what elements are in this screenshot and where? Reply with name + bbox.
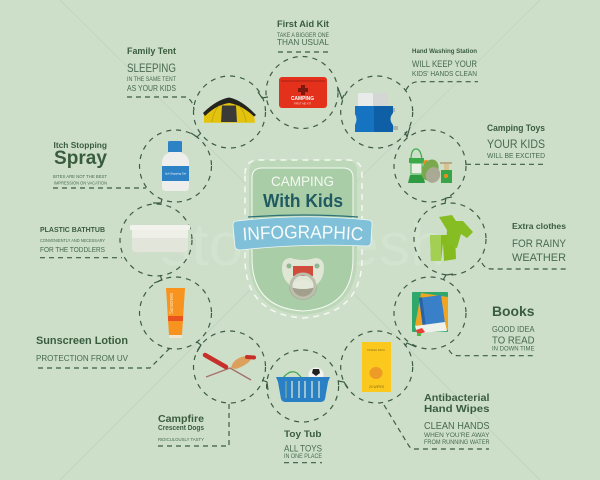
text: camping toys [487, 123, 545, 160]
panel: hand washing station [341, 48, 478, 148]
text: plastic bathtub: CONVENIENTLY AND NECESSARY [40, 238, 105, 243]
text: books: TO READ [492, 334, 535, 346]
ribbon banner [232, 216, 372, 250]
text: itch stopping spray: IMPRESSION ON VACATION [54, 180, 107, 186]
text: extra clothes [512, 221, 567, 264]
ribbon banner: INFOGRAPHIC [244, 225, 363, 240]
icon: wipes pack: TRAVEL PACK [367, 348, 385, 352]
text: hand washing station: Hand Washing Station [412, 48, 477, 55]
text: books: Books [492, 303, 535, 319]
icon: stack of books [412, 292, 448, 336]
text: hand washing station: KIDS' HANDS CLEAN [412, 71, 477, 78]
text: camping toys: WILL BE EXCITED [487, 153, 545, 160]
panel: antibacterial hand wipes [341, 331, 490, 449]
text: family tent: Family Tent [127, 46, 177, 57]
text: family tent [127, 46, 177, 93]
text: plastic bathtub: PLASTIC BATHTUB [40, 227, 105, 234]
text: itch stopping spray: Itch Stopping [54, 140, 107, 150]
icon: sunscreen tube: Sunscreen [169, 293, 175, 314]
text: itch stopping spray: BITES ARE NOT THE BEST [53, 174, 107, 179]
text: books: GOOD IDEA [492, 325, 535, 334]
text: campfire: Campfire [158, 414, 204, 425]
text: hand wipes: WHEN YOU'RE AWAY [424, 432, 490, 439]
icon: pacifier [282, 258, 324, 300]
panel: books [394, 277, 535, 356]
text: hand wipes [424, 392, 490, 446]
text: hand washing station: WILL KEEP YOUR [412, 59, 477, 69]
icon: hot dogs on sticks [205, 355, 254, 380]
text: itch stopping spray: Spray [54, 148, 107, 169]
text: toy tub: Toy Tub [284, 429, 322, 440]
panel: family tent [127, 46, 266, 148]
panel: toy tub [267, 350, 339, 463]
icon: first aid kit [279, 77, 327, 108]
text: hand wipes: Hand Wipes [424, 403, 490, 415]
text: first aid kit: THAN USUAL [277, 37, 329, 47]
text: extra clothes: WEATHER [512, 252, 566, 264]
text: plastic bathtub: FOR THE TODDLERS [40, 245, 105, 254]
text: toy tub: IN ONE PLACE [284, 454, 322, 460]
text: extra clothes: Extra clothes [512, 221, 566, 231]
text: toy tub [284, 429, 322, 460]
panel: campfire crescent dogs [158, 331, 266, 446]
text: sunscreen lotion [36, 335, 129, 363]
text: campfire: Crescent Dogs [158, 425, 204, 432]
text: itch stopping spray [53, 140, 107, 186]
center badge [232, 159, 372, 319]
text: camping toys: YOUR KIDS [487, 137, 545, 151]
text: extra clothes: FOR RAINY [512, 238, 567, 250]
panel: first aid kit [266, 19, 338, 128]
icon: first aid kit: FIRST AID KIT [294, 102, 311, 106]
text: camping toys: Camping Toys [487, 123, 545, 133]
text: stockfresh [160, 211, 445, 278]
text: books: IN DOWN TIME [492, 346, 534, 352]
panel: camping toys [394, 123, 545, 202]
icon: spray bottle: Itch Stopping Gel [165, 172, 186, 176]
icon: spray bottle [162, 141, 189, 191]
text: hand washing station [412, 48, 477, 78]
text: family tent: AS YOUR KIDS [127, 84, 176, 93]
text: hand wipes: CLEAN HANDS [424, 421, 490, 432]
text: campfire [158, 414, 204, 442]
text: toy tub: ALL TOYS [284, 444, 322, 454]
circle connectors [153, 88, 453, 390]
text: hand wipes: FROM RUNNING WATER [424, 440, 490, 446]
icon: shirt and pants [430, 215, 473, 261]
icon: toy basket [276, 368, 330, 402]
panel: sunscreen lotion [36, 277, 212, 368]
text: hand wipes: Antibacterial [424, 392, 490, 404]
text: first aid kit: TAKE A BIGGER ONE [277, 33, 329, 39]
badge heading: with kids: With Kids [263, 190, 343, 211]
icon: bathtub [130, 225, 190, 254]
icon: water jug [355, 93, 398, 132]
text: books [492, 303, 535, 352]
text: family tent: SLEEPING [127, 61, 176, 75]
text: campfire: RIDICULOUSLY TASTY [158, 437, 204, 442]
text: first aid kit: First Aid Kit [277, 19, 330, 30]
panel: plastic bathtub [40, 204, 192, 276]
panel: extra clothes [414, 203, 567, 275]
text: first aid kit [277, 19, 330, 47]
text: plastic bathtub [40, 227, 105, 254]
icon: sunscreen tube [166, 288, 185, 338]
badge heading: camping: CAMPING [271, 173, 334, 189]
text: family tent: IN THE SAME TENT [127, 77, 176, 83]
icon: toy lanterns [408, 149, 452, 185]
icon: wipes pack [362, 342, 391, 392]
icon: tent [203, 98, 256, 123]
text: sunscreen lotion: Sunscreen Lotion [36, 335, 128, 347]
text: sunscreen lotion: PROTECTION FROM UV [36, 354, 129, 363]
panel: itch stopping spray [53, 130, 212, 202]
icon: first aid kit: CAMPING [291, 96, 314, 102]
icon: wipes pack: 20 WIPES [369, 385, 385, 389]
